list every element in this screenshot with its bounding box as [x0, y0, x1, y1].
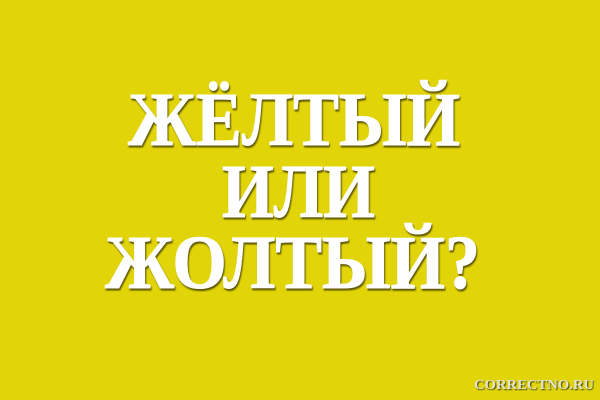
heading line 2: ИЛИ [222, 150, 375, 234]
heading line 1: ЖЁЛТЫЙ [128, 78, 460, 162]
heading line 3: ЖОЛТЫЙ? [105, 221, 480, 305]
watermark: CORRECTNO.RU [474, 377, 594, 392]
